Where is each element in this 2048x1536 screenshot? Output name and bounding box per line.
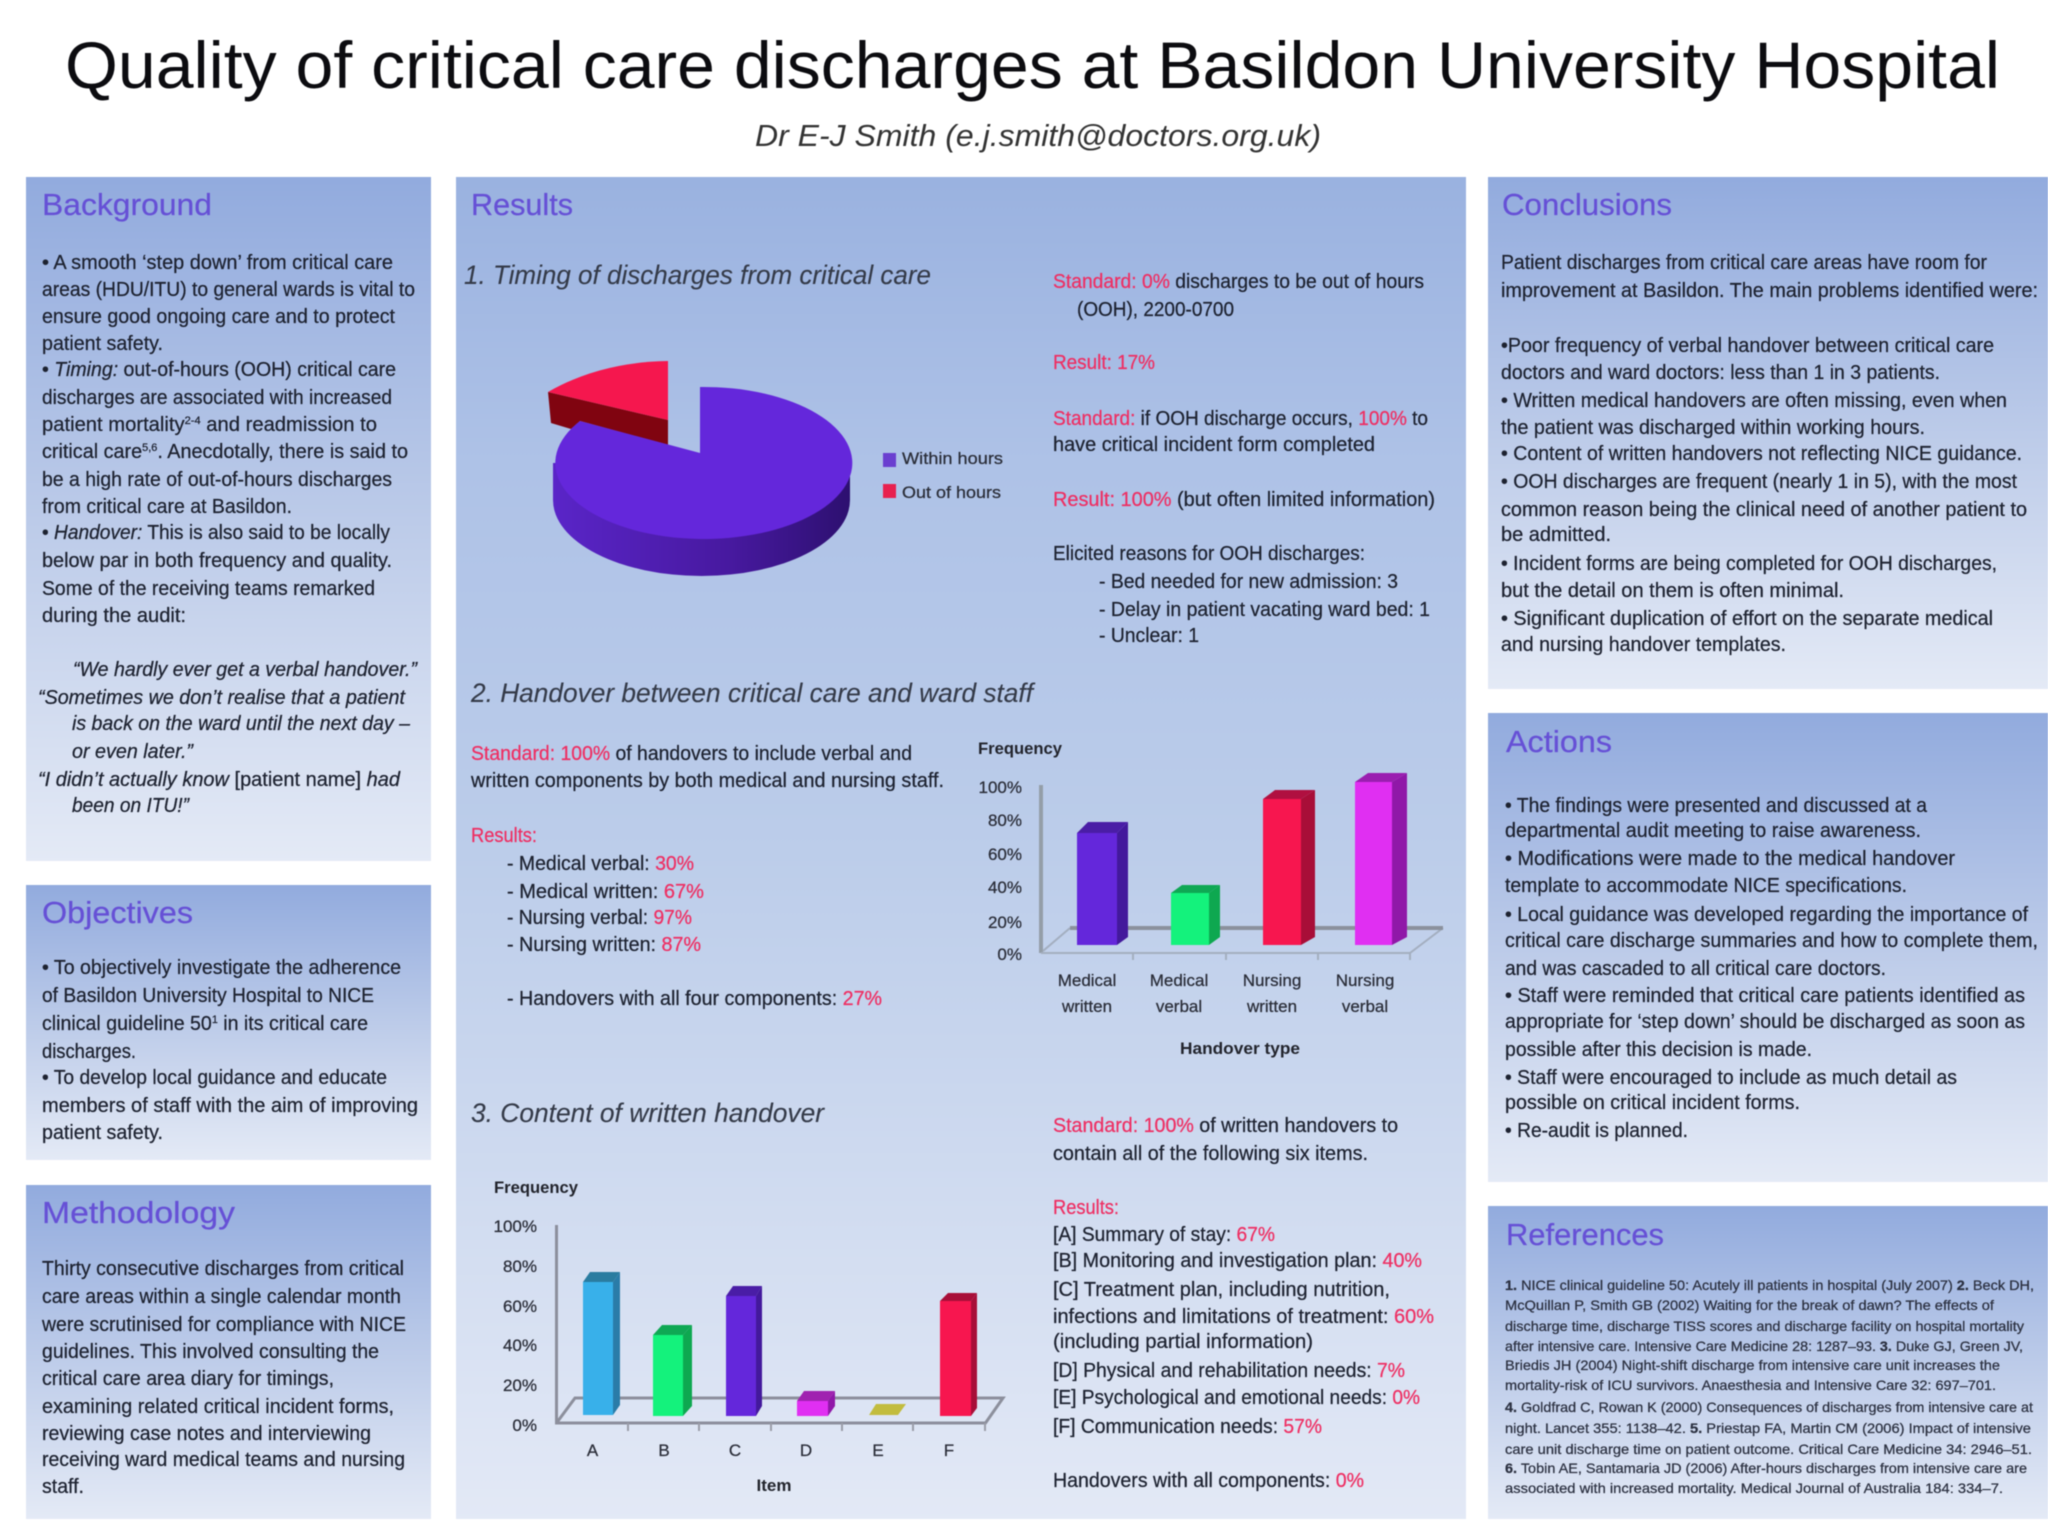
text block: references: mortality-risk of ICU survivors. Anaesthesia and Intensive Care 32: 697–701. bbox=[1505, 1377, 1996, 1393]
text block: actions: possible after this decision is made. bbox=[1505, 1039, 1812, 1061]
heading: objectives: Objectives bbox=[42, 895, 193, 930]
text block: actions: • The findings were presented and discussed at a bbox=[1505, 795, 1928, 817]
text block: handover standards and results: - Nursing verbal: 97% bbox=[507, 907, 692, 929]
text block: background bullets: from critical care at Basildon. bbox=[42, 496, 292, 518]
text block: background bullets: areas (HDU/ITU) to general wards is vital to bbox=[42, 279, 415, 301]
panel: actions bbox=[1488, 713, 2048, 1182]
text block: background bullets: ensure good ongoing care and to protect bbox=[42, 306, 395, 328]
subheading: written handover content: 3. Content of written handover bbox=[471, 1098, 825, 1128]
bar: item C bbox=[726, 1286, 762, 1416]
subheading: handover: 2. Handover between critical care and ward staff bbox=[470, 678, 1035, 708]
panel: conclusions bbox=[1488, 177, 2048, 689]
bar: medical verbal bbox=[1171, 885, 1220, 945]
text block: background bullets: and readmission to bbox=[201, 414, 377, 436]
text block: references: 6. Tobin AE, Santamaria JD (2006) After-hours discharges from intensive care are bbox=[1505, 1460, 2027, 1476]
heading: methodology: Methodology bbox=[42, 1195, 236, 1230]
chart 2 category labels: Medical bbox=[1150, 971, 1208, 990]
text block: background bullets: • A smooth ‘step down’ from critical care bbox=[42, 252, 393, 274]
text block: conclusions: •Poor frequency of verbal handover between critical care bbox=[1501, 335, 1994, 357]
bar: item E bbox=[869, 1404, 906, 1415]
heading: background: Background bbox=[42, 187, 212, 222]
text block: conclusions: but the detail on them is often minimal. bbox=[1501, 580, 1844, 602]
text block: background bullets: • Handover: This is also said to be locally bbox=[42, 522, 390, 544]
text block: handover standards and results: - Handovers with all four components: 27% bbox=[507, 988, 882, 1010]
chart 2 category labels: verbal bbox=[1156, 997, 1202, 1016]
text block: objectives bullets: discharges. bbox=[42, 1041, 136, 1063]
text block: objectives bullets: in its critical care bbox=[218, 1013, 368, 1035]
text block: timing standards and results: Standard: 0% discharges to be out of hours bbox=[1053, 271, 1424, 293]
text block: background bullets: . Anecdotally, there is said to bbox=[157, 441, 408, 463]
text block: references: Briedis JH (2004) Night-shift discharge from intensive care unit increases the bbox=[1505, 1357, 2000, 1373]
chart 2 category labels: Nursing bbox=[1243, 971, 1301, 990]
bar: medical written bbox=[1077, 822, 1128, 945]
chart 3 y-axis labels: 20% bbox=[503, 1376, 537, 1395]
chart 3 category labels: C bbox=[729, 1441, 741, 1460]
chart 3 y-axis labels: 100% bbox=[494, 1217, 537, 1236]
text block: handover standards and results bbox=[470, 743, 944, 1010]
text block: methodology: guidelines. This involved consulting the bbox=[42, 1341, 379, 1363]
chart 3 category labels: A bbox=[587, 1441, 599, 1460]
chart 3 y-axis labels: 40% bbox=[503, 1336, 537, 1355]
chart 2 category labels: Nursing bbox=[1336, 971, 1394, 990]
text block: objectives bullets bbox=[42, 957, 418, 1144]
chart 2 y-axis labels: 60% bbox=[988, 845, 1022, 864]
bar: item D bbox=[797, 1391, 835, 1416]
text block: objectives bullets: 1 bbox=[212, 1014, 218, 1026]
text block: content standards and results: infections and limitations of treatment: 60% bbox=[1053, 1306, 1434, 1328]
bar: item F bbox=[940, 1293, 977, 1416]
text block: background bullets: during the audit: bbox=[42, 605, 186, 627]
text block: actions: critical care discharge summaries and how to complete them, bbox=[1505, 930, 2038, 952]
text block: content standards and results: [B] Monitoring and investigation plan: 40% bbox=[1053, 1250, 1422, 1272]
text block: actions: • Modifications were made to the medical handover bbox=[1505, 848, 1955, 870]
panel: methodology bbox=[26, 1185, 431, 1519]
text block: methodology bbox=[41, 1258, 406, 1498]
bar chart: handover type bbox=[978, 739, 1443, 1058]
chart 3 x-axis title: Item bbox=[757, 1476, 791, 1495]
text block: background bullets bbox=[42, 252, 415, 627]
text block: actions: departmental audit meeting to raise awareness. bbox=[1505, 820, 1921, 842]
text block: content standards and results bbox=[1053, 1115, 1434, 1492]
text block: background bullets: 5,6 bbox=[142, 442, 157, 454]
text block: background bullets: critical care bbox=[42, 441, 143, 463]
bar: item B bbox=[653, 1325, 692, 1416]
chart 2 y-axis labels: 80% bbox=[988, 811, 1022, 830]
chart 2 y-axis labels bbox=[979, 778, 1022, 964]
panel: background bbox=[26, 177, 431, 861]
chart 2 x-axis title: Handover type bbox=[1180, 1039, 1300, 1058]
text block: references: care unit discharge time on patient outcome. Critical Care Medicine 34: 2946–51. bbox=[1505, 1441, 2032, 1457]
text block: conclusions: and nursing handover templates. bbox=[1501, 634, 1786, 656]
text block: methodology: receiving ward medical teams and nursing bbox=[42, 1449, 405, 1471]
text block: content standards and results: contain all of the following six items. bbox=[1053, 1143, 1368, 1165]
text block: background bullets: 2-4 bbox=[185, 415, 201, 427]
text block: actions: and was cascaded to all critical care doctors. bbox=[1505, 958, 1886, 980]
text block: handover standards and results: - Medical verbal: 30% bbox=[507, 853, 694, 875]
text block: timing standards and results: Elicited reasons for OOH discharges: bbox=[1053, 543, 1365, 565]
chart 2 y-axis title: Frequency bbox=[978, 739, 1063, 758]
bar chart: written handover items bbox=[494, 1178, 1003, 1495]
chart 3 y-axis title: Frequency bbox=[494, 1178, 579, 1197]
chart 3 category labels: D bbox=[800, 1441, 812, 1460]
text block: conclusions: improvement at Basildon. The main problems identified were: bbox=[1501, 280, 2038, 302]
text block: handover standards and results: - Nursing written: 87% bbox=[507, 934, 701, 956]
text block: conclusions: common reason being the clinical need of another patient to bbox=[1501, 499, 2027, 521]
text block: references: night. Lancet 355: 1138–42. 5. Priestap FA, Martin CM (2006) Impact of intensive bbox=[1505, 1420, 2031, 1436]
text block: staff quotes: “Sometimes we don’t realise that a patient bbox=[38, 687, 406, 709]
text block: references: associated with increased mortality. Medical Journal of Australia 184: 334–7. bbox=[1505, 1480, 2003, 1496]
text block: content standards and results: Handovers with all components: 0% bbox=[1053, 1470, 1364, 1492]
text block: objectives bullets: • To objectively investigate the adherence bbox=[42, 957, 401, 979]
author line: Dr E-J Smith (e.j.smith@doctors.org.uk) bbox=[755, 118, 1321, 153]
text block: methodology: examining related critical incident forms, bbox=[42, 1396, 394, 1418]
text block: actions: • Re-audit is planned. bbox=[1505, 1120, 1688, 1142]
text block: staff quotes: or even later.” bbox=[72, 741, 194, 763]
chart 2 category labels: Medical bbox=[1058, 971, 1116, 990]
text block: content standards and results: Standard: 100% of written handovers to bbox=[1053, 1115, 1398, 1137]
chart 2 category labels: verbal bbox=[1342, 997, 1388, 1016]
text block: actions: possible on critical incident forms. bbox=[1505, 1092, 1800, 1114]
text block: references: McQuillan P, Smith GB (2002) Waiting for the break of dawn? The effects of bbox=[1505, 1297, 1994, 1313]
text block: references: 4. Goldfrad C, Rowan K (2000) Consequences of discharges from intensive care at bbox=[1505, 1399, 2033, 1415]
chart 2 y-axis labels: 40% bbox=[988, 878, 1022, 897]
text block: content standards and results: [A] Summary of stay: 67% bbox=[1053, 1224, 1275, 1246]
text block: conclusions: • OOH discharges are frequent (nearly 1 in 5), with the most bbox=[1501, 471, 2017, 493]
text block: conclusions: be admitted. bbox=[1501, 524, 1611, 546]
text block: handover standards and results: Results: bbox=[471, 825, 537, 847]
text block: references bbox=[1505, 1277, 2034, 1496]
bar: nursing written bbox=[1263, 790, 1315, 945]
text block: timing standards and results bbox=[1053, 271, 1435, 647]
text block: staff quotes: “I didn’t actually know [patient name] had bbox=[38, 769, 401, 791]
text block: content standards and results: [E] Psychological and emotional needs: 0% bbox=[1053, 1387, 1420, 1409]
text block: content standards and results: [F] Communication needs: 57% bbox=[1053, 1416, 1322, 1438]
text block: conclusions: the patient was discharged within working hours. bbox=[1501, 417, 1925, 439]
bar: nursing verbal bbox=[1355, 773, 1407, 945]
text block: timing standards and results: (OOH), 2200-0700 bbox=[1077, 299, 1234, 321]
text block: methodology: were scrutinised for compliance with NICE bbox=[41, 1314, 406, 1336]
text block: timing standards and results: Result: 17% bbox=[1053, 352, 1155, 374]
text block: content standards and results: (including partial information) bbox=[1053, 1331, 1313, 1353]
text block: content standards and results: [C] Treatment plan, including nutrition, bbox=[1053, 1279, 1390, 1301]
text block: objectives bullets: • To develop local guidance and educate bbox=[42, 1067, 387, 1089]
text block: methodology: care areas within a single calendar month bbox=[42, 1286, 401, 1308]
chart 2 category labels: written bbox=[1246, 997, 1297, 1016]
panel: objectives bbox=[26, 885, 431, 1160]
heading: references: References bbox=[1506, 1217, 1664, 1252]
pie chart: timing of discharges bbox=[548, 361, 852, 576]
text block: handover standards and results: - Medical written: 67% bbox=[507, 881, 704, 903]
text block: conclusions bbox=[1501, 252, 2038, 656]
chart 2 category labels bbox=[1058, 971, 1394, 1016]
chart 2 category labels: written bbox=[1061, 997, 1112, 1016]
text block: methodology: critical care area diary for timings, bbox=[42, 1368, 334, 1390]
text block: timing standards and results: Standard: if OOH discharge occurs, 100% to bbox=[1053, 408, 1428, 430]
title: Quality of critical care discharges at Basildon University Hospital bbox=[65, 28, 2000, 102]
text block: content standards and results: [D] Physical and rehabilitation needs: 7% bbox=[1053, 1360, 1405, 1382]
chart 2 y-axis labels: 100% bbox=[979, 778, 1022, 797]
text block: objectives bullets: patient safety. bbox=[42, 1122, 163, 1144]
text block: conclusions: • Content of written handovers not reflecting NICE guidance. bbox=[1501, 443, 2022, 465]
pie legend bbox=[883, 449, 1003, 502]
bar: item A bbox=[583, 1272, 620, 1415]
text block: background bullets: Some of the receiving teams remarked bbox=[42, 578, 375, 600]
chart 3 y-axis labels: 80% bbox=[503, 1257, 537, 1276]
chart 3 category labels: E bbox=[872, 1441, 884, 1460]
text block: references: after intensive care. Intensive Care Medicine 28: 1287–93. 3. Duke GJ, Green JV, bbox=[1505, 1338, 2023, 1354]
text block: actions: • Staff were reminded that critical care patients identified as bbox=[1505, 985, 2025, 1007]
text block: objectives bullets: of Basildon University Hospital to NICE bbox=[42, 985, 374, 1007]
chart 3 category labels: B bbox=[658, 1441, 670, 1460]
chart 2 y-axis labels: 20% bbox=[988, 913, 1022, 932]
text block: actions: template to accommodate NICE specifications. bbox=[1505, 875, 1907, 897]
text block: background bullets: below par in both frequency and quality. bbox=[42, 550, 392, 572]
chart 3 y-axis labels: 0% bbox=[512, 1416, 537, 1435]
text block: timing standards and results: Result: 100% (but often limited information) bbox=[1053, 489, 1435, 511]
text block: references: discharge time, discharge TISS scores and discharge facility on hospital mortality bbox=[1505, 1318, 2024, 1334]
panel: results bbox=[456, 177, 1466, 1519]
text block: methodology: Thirty consecutive discharges from critical bbox=[42, 1258, 404, 1280]
pie legend: Out of hours bbox=[902, 483, 1001, 502]
heading: results: Results bbox=[471, 187, 573, 222]
text block: content standards and results: Results: bbox=[1053, 1197, 1119, 1219]
text block: background bullets: be a high rate of out-of-hours discharges bbox=[42, 469, 392, 491]
chart 3 category labels bbox=[587, 1441, 954, 1460]
text block: actions: • Local guidance was developed regarding the importance of bbox=[1505, 904, 2028, 926]
text block: methodology: staff. bbox=[42, 1476, 84, 1498]
text block: staff quotes: been on ITU!” bbox=[72, 795, 190, 817]
text block: conclusions: • Significant duplication of effort on the separate medical bbox=[1501, 608, 1993, 630]
text block: methodology: reviewing case notes and interviewing bbox=[42, 1423, 371, 1445]
text block: actions: • Staff were encouraged to include as much detail as bbox=[1505, 1067, 1957, 1089]
text block: handover standards and results: Standard: 100% of handovers to include verbal and bbox=[471, 743, 912, 765]
chart 3 y-axis labels: 60% bbox=[503, 1297, 537, 1316]
text block: background bullets: • Timing: out-of-hours (OOH) critical care bbox=[42, 359, 396, 381]
text block: objectives bullets: members of staff with the aim of improving bbox=[42, 1095, 418, 1117]
chart 3 y-axis labels bbox=[494, 1217, 537, 1435]
text block: timing standards and results: - Bed needed for new admission: 3 bbox=[1099, 571, 1398, 593]
text block: actions: appropriate for ‘step down’ should be discharged as soon as bbox=[1505, 1011, 2025, 1033]
text block: objectives bullets: clinical guideline 50 bbox=[42, 1013, 215, 1035]
text block: conclusions: • Incident forms are being completed for OOH discharges, bbox=[1501, 553, 1997, 575]
text block: staff quotes: is back on the ward until the next day – bbox=[72, 713, 411, 735]
text block: staff quotes: “We hardly ever get a verbal handover.” bbox=[73, 659, 418, 681]
heading: conclusions: Conclusions bbox=[1502, 187, 1672, 222]
text block: conclusions: Patient discharges from critical care areas have room for bbox=[1501, 252, 1987, 274]
text block: references: 1. NICE clinical guideline 50: Acutely ill patients in hospital (July 2007) 2. Beck DH, bbox=[1505, 1277, 2034, 1293]
text block: actions bbox=[1505, 795, 2038, 1142]
text block: conclusions: • Written medical handovers are often missing, even when bbox=[1501, 390, 2007, 412]
text block: staff quotes bbox=[38, 659, 418, 817]
pie legend: Within hours bbox=[902, 449, 1003, 468]
text block: conclusions: doctors and ward doctors: less than 1 in 3 patients. bbox=[1501, 362, 1940, 384]
heading: actions: Actions bbox=[1506, 724, 1612, 759]
chart 2 y-axis labels: 0% bbox=[997, 945, 1022, 964]
text block: background bullets: discharges are associated with increased bbox=[42, 387, 392, 409]
text block: background bullets: patient mortality bbox=[42, 414, 183, 436]
text block: timing standards and results: have critical incident form completed bbox=[1053, 434, 1375, 456]
chart 3 category labels: F bbox=[944, 1441, 954, 1460]
text block: background bullets: patient safety. bbox=[42, 333, 163, 355]
text block: timing standards and results: - Unclear: 1 bbox=[1099, 625, 1199, 647]
text block: timing standards and results: - Delay in patient vacating ward bed: 1 bbox=[1099, 599, 1430, 621]
subheading: timing of discharges: 1. Timing of discharges from critical care bbox=[464, 260, 931, 290]
text block: handover standards and results: written components by both medical and nursing staff. bbox=[470, 770, 944, 792]
panel: references bbox=[1488, 1206, 2048, 1519]
